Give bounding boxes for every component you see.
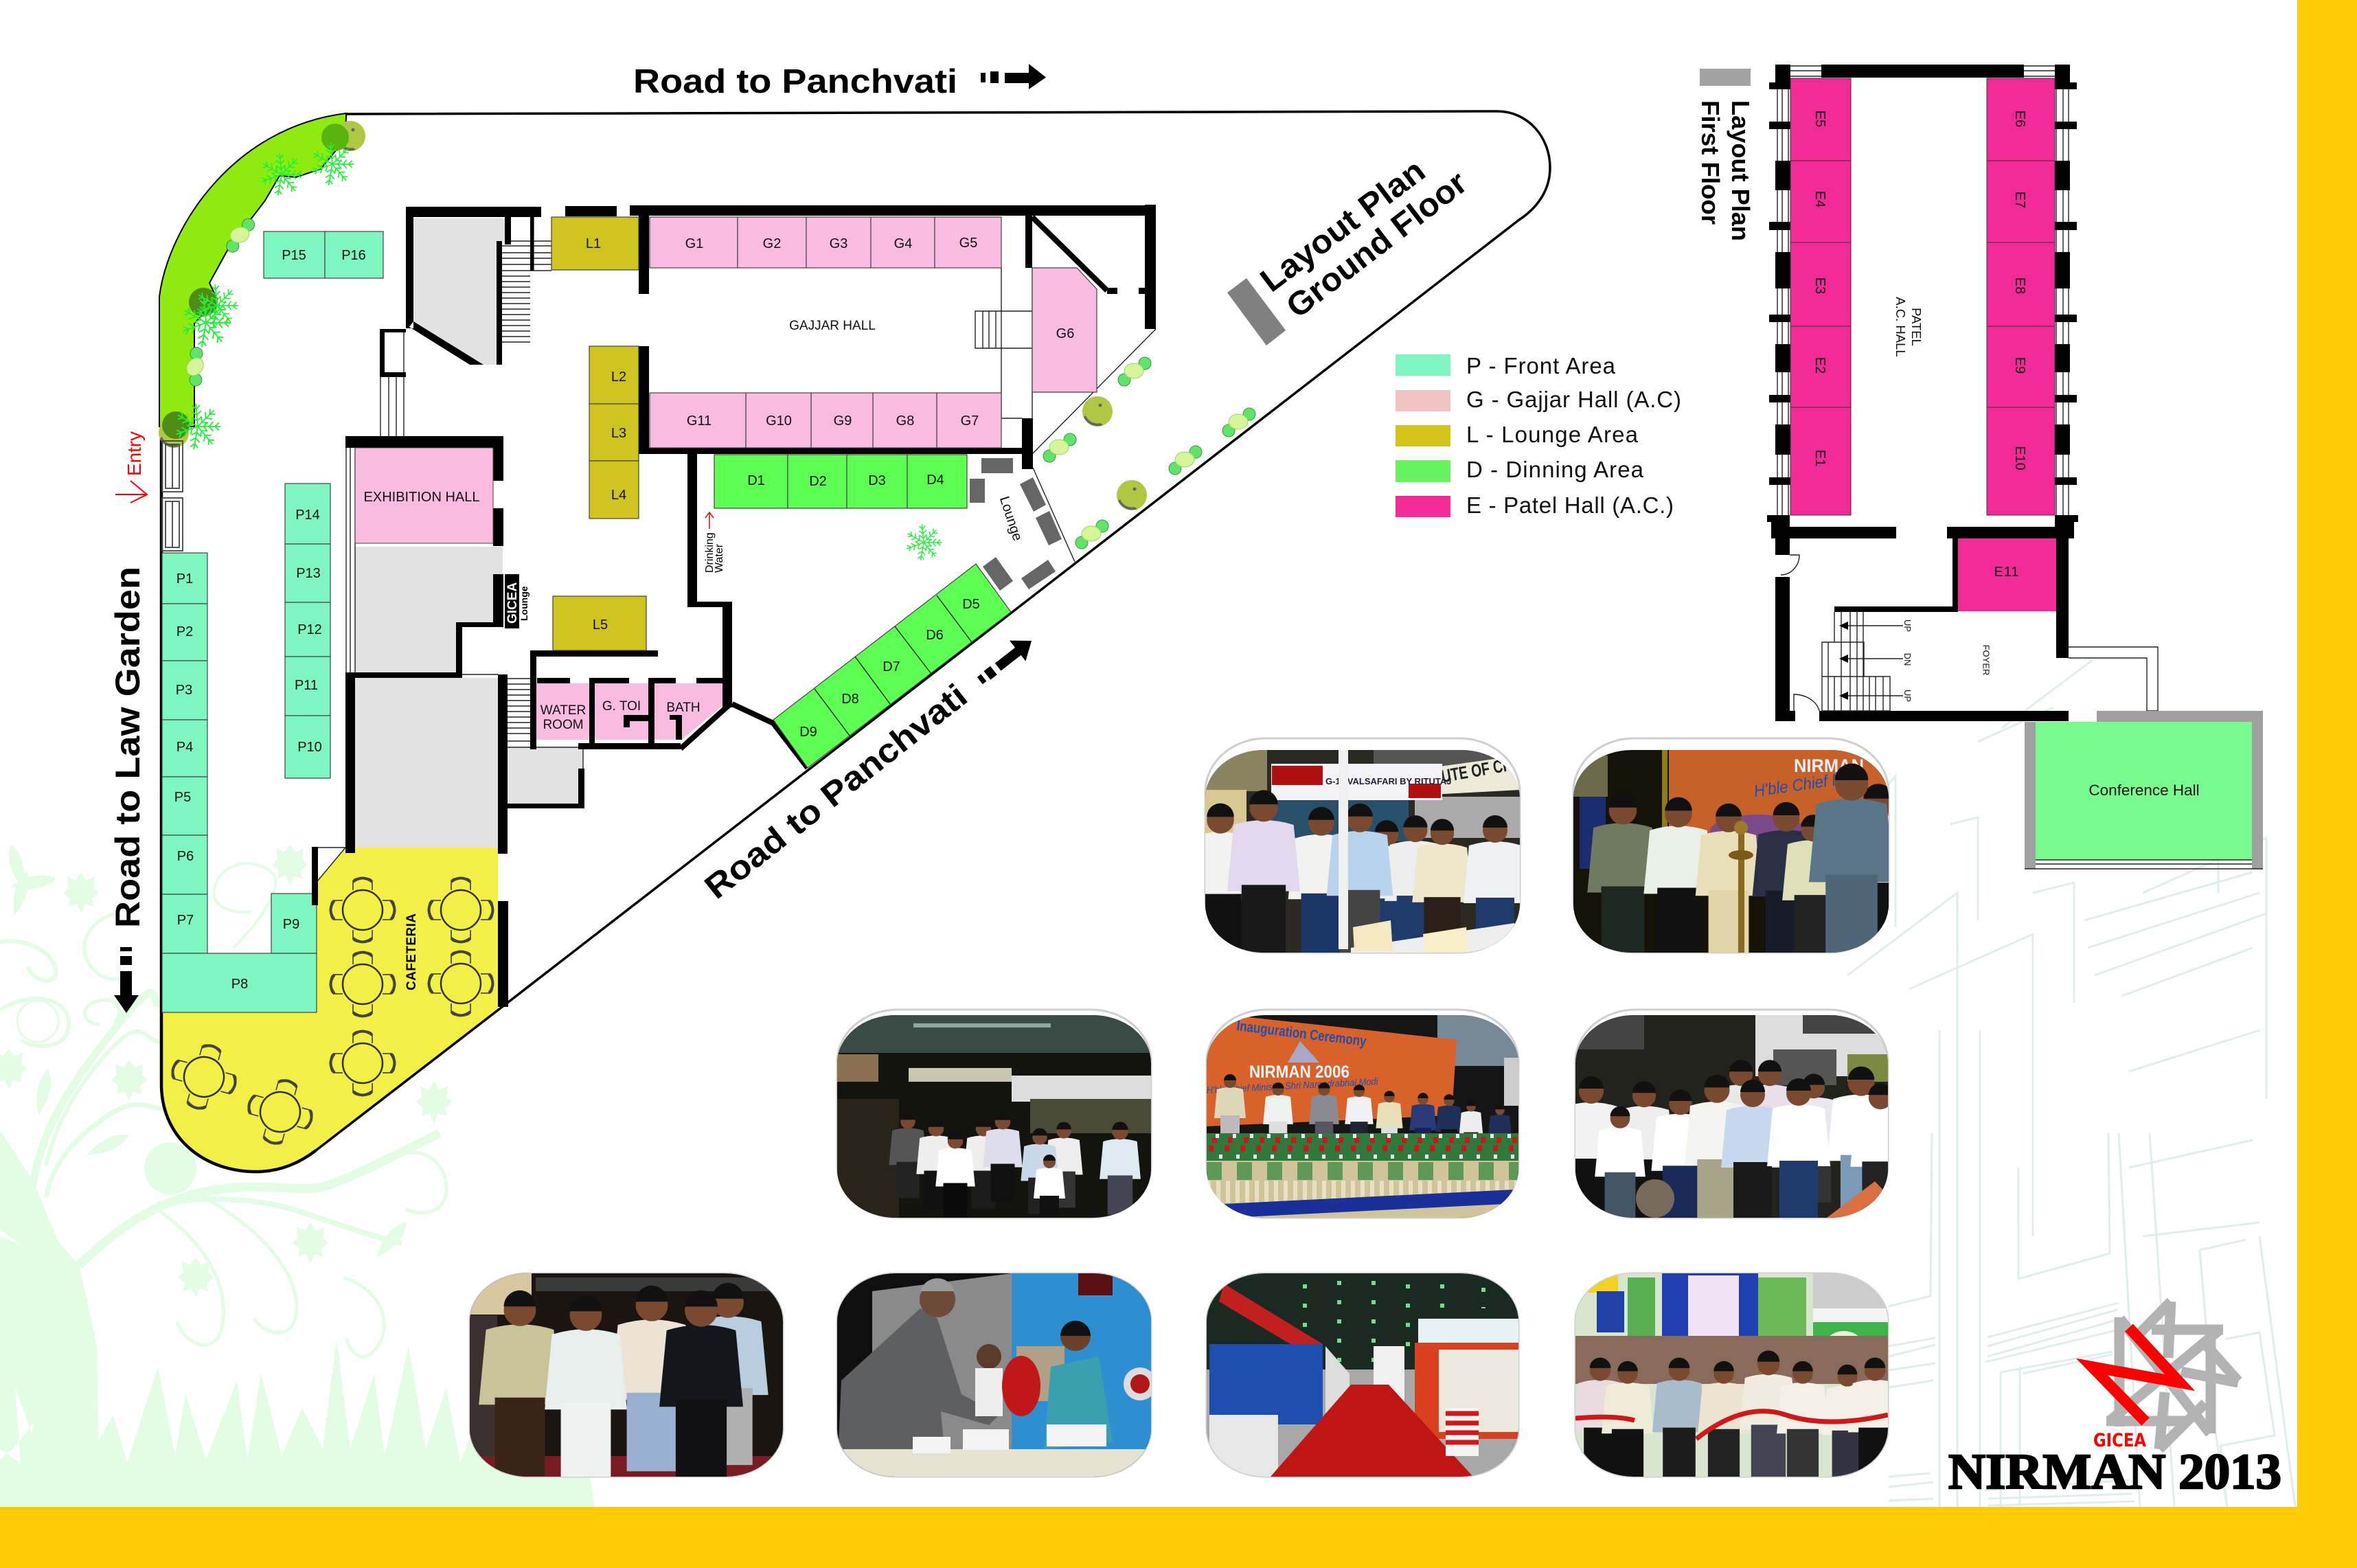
- first floor title: First Floor: [1696, 100, 1724, 225]
- stall: L3: [589, 404, 639, 461]
- stairs and thin construction lines: [318, 217, 1156, 880]
- stall: P2: P2: [177, 624, 193, 639]
- GICEA lounge sign: Lounge: [519, 586, 530, 621]
- GICEA lounge sign: [505, 574, 530, 628]
- yellow frame right: [2297, 0, 2357, 1568]
- photo: lighting the lamp: [1573, 750, 1916, 956]
- garden plants along diagonal road: [1043, 357, 1255, 549]
- stall: P3: P3: [176, 683, 192, 698]
- stall: G7: [937, 393, 1001, 448]
- grey service rooms: [355, 218, 583, 848]
- staircase: [1822, 612, 1890, 711]
- stall: E8: [1987, 242, 2055, 326]
- arrow: top road direction: [981, 64, 1046, 89]
- stall: E5: E5: [1812, 111, 1827, 127]
- black walls: [312, 205, 1156, 1007]
- stall: G6: [1032, 268, 1097, 392]
- stall: E4: [1790, 161, 1851, 242]
- stall: E9: [1987, 326, 2055, 407]
- stall: P1: [162, 553, 207, 604]
- stall: P11: P11: [295, 678, 318, 693]
- stall: E3: [1790, 242, 1851, 326]
- stall: P3: [162, 661, 207, 720]
- stall: D4: [907, 455, 967, 508]
- stall: D3: D3: [868, 473, 886, 488]
- lounge label: Lounge: [997, 495, 1025, 543]
- stalls: D5 to D9 diagonal row: D8: [841, 692, 859, 707]
- cafeteria tables: [164, 878, 493, 1152]
- arrow: diagonal road direction: [972, 630, 1039, 691]
- photo frames: [470, 738, 1889, 1477]
- corridor to conference hall: [2069, 647, 2158, 711]
- stall: G11: G11: [687, 413, 711, 429]
- stall: E11: [1958, 538, 2056, 611]
- stalls: D5 to D9 diagonal row: D7: [883, 659, 900, 674]
- stall: P14: [285, 484, 330, 544]
- stall: L4: L4: [611, 488, 626, 503]
- stall: G2: G2: [763, 236, 781, 251]
- doors: [1781, 555, 1819, 711]
- stall: G4: G4: [894, 236, 912, 251]
- stall: L5: L5: [593, 617, 608, 633]
- stall: P10: [285, 716, 330, 778]
- photo: visitors at stall: [1205, 750, 1520, 953]
- photo: exhibition aisle: [1207, 1273, 1518, 1477]
- stall: E9: E9: [2012, 357, 2027, 374]
- legend: D - Dinning Area: [1466, 457, 1644, 482]
- stair arrows and labels: UP: [1902, 690, 1913, 702]
- heading: road to panchvati top: Road to Panchvati: [633, 63, 957, 100]
- stall: E6: [1987, 78, 2055, 161]
- stall: G9: G9: [834, 413, 852, 429]
- stall: G3: G3: [830, 236, 847, 251]
- cafeteria label: CAFETERIA: [405, 913, 419, 990]
- stall: L3: L3: [611, 426, 626, 441]
- stall: D1: D1: [747, 473, 765, 488]
- stall: E7: E7: [2012, 192, 2027, 208]
- site boundary rounded corner: [161, 427, 316, 1172]
- stall: P10: P10: [297, 740, 322, 755]
- stall: E6: E6: [2012, 111, 2027, 127]
- stall: E5: [1790, 78, 1851, 161]
- photo: visitors at stall: G-11 VALSAFARI BY RITUTAJ: [1325, 776, 1451, 786]
- photo: inauguration stage: [1206, 1015, 1531, 1218]
- stall: G7: G7: [961, 413, 979, 429]
- stall: P1: P1: [177, 571, 193, 587]
- stall: G11: [650, 393, 746, 448]
- stall: D1: [714, 455, 788, 508]
- panel: first floor plan: [1767, 65, 2263, 869]
- stall: P16: P16: [341, 248, 366, 263]
- entry gates: [162, 441, 183, 551]
- stall: P12: P12: [297, 622, 322, 637]
- legend: [1396, 353, 1681, 518]
- panel: ground floor plan: [115, 111, 1550, 1172]
- background tree and grass illustration: [0, 843, 595, 1507]
- first floor title: Layout Plan: [1727, 100, 1755, 241]
- stall: D3: [847, 455, 907, 508]
- stall: P15: P15: [282, 248, 306, 263]
- stall: P8: P8: [231, 977, 248, 992]
- wet rooms: WATER: [540, 703, 586, 718]
- stall: E1: [1790, 407, 1851, 515]
- patel hall label: PATEL: [1909, 308, 1924, 346]
- stall: E2: E2: [1812, 357, 1827, 374]
- background building line art: [1820, 660, 2295, 1507]
- courtyard fern: [905, 524, 942, 561]
- stall: E11: E11: [1994, 565, 2020, 580]
- first floor title: [1696, 100, 1755, 241]
- stall: G2: [738, 217, 806, 268]
- stall: P13: P13: [296, 566, 321, 581]
- photo: inauguration stage: Inauguration Ceremony: [1236, 1018, 1367, 1049]
- stall: E4: E4: [1812, 191, 1827, 207]
- stall: G4: [871, 217, 935, 268]
- wet rooms: ROOM: [543, 718, 584, 732]
- stall: L5: [553, 596, 646, 650]
- window lines: [1777, 66, 2069, 515]
- stall: P4: [162, 720, 207, 777]
- yellow frame bottom: [0, 1507, 2357, 1568]
- stall: P7: P7: [177, 913, 194, 928]
- stall: P15: [264, 231, 325, 278]
- stall: G1: G1: [685, 236, 703, 251]
- patel hall label: A.C. HALL: [1893, 297, 1908, 357]
- photo: ribbon cutting: [1573, 1273, 1902, 1479]
- stalls: D5 to D9 diagonal row: D6: [926, 628, 944, 643]
- stall: P2: [162, 604, 207, 661]
- logo: GICEA star: GICEA: [2093, 1430, 2146, 1451]
- arrow: law garden direction: [114, 947, 139, 1013]
- drinking water label: Drinking: [704, 532, 716, 573]
- GICEA lounge sign: GICEA: [505, 582, 520, 624]
- stall: E10: E10: [2012, 446, 2027, 470]
- drinking water label: [704, 512, 725, 573]
- heading: road to law garden: Road to Law Garden: [109, 567, 147, 928]
- wet rooms: [536, 683, 722, 740]
- logo: GICEA star: [2092, 1302, 2238, 1451]
- stall: E2: [1790, 326, 1851, 407]
- stall: D4: D4: [926, 473, 944, 488]
- stall: E7: [1987, 161, 2055, 242]
- stall: P6: P6: [177, 849, 194, 864]
- stall: P11: [285, 657, 330, 716]
- first floor title bar: [1700, 69, 1751, 86]
- stall: D2: D2: [809, 474, 827, 489]
- stall: L4: [589, 461, 639, 519]
- photo: visitors at stall: INSTITUTE OF CIV: [1398, 753, 1517, 794]
- stall: P4: P4: [177, 740, 193, 755]
- stall: P16: [325, 231, 383, 278]
- wet rooms: BATH: [666, 701, 701, 715]
- stall: P14: P14: [295, 508, 320, 523]
- stall: E10: [1987, 407, 2055, 515]
- entry label: Entry: [124, 431, 145, 476]
- photo: lighting the lamp: H'ble Chief Min: [1753, 768, 1857, 801]
- lounge seating: [970, 458, 1062, 591]
- grey title bar ground floor: [1227, 278, 1286, 345]
- drinking water label: Water: [714, 543, 725, 573]
- stall: G5: [935, 217, 1001, 268]
- legend: L - Lounge Area: [1466, 422, 1639, 447]
- cafeteria floor: [162, 848, 498, 1172]
- stall: G10: [746, 393, 811, 448]
- legend: G - Gajjar Hall (A.C): [1466, 387, 1681, 412]
- first floor walls: [1767, 65, 2078, 721]
- legend: P - Front Area: [1466, 353, 1616, 378]
- stall: D2: [788, 455, 847, 508]
- stall: G1: [650, 217, 738, 268]
- photo: lighting the lamp: NIRMAN: [1794, 755, 1864, 776]
- stalls: D5 to D9 diagonal row: D5: [962, 597, 980, 612]
- entry arrow: [115, 481, 147, 503]
- stall: G10: G10: [766, 413, 792, 429]
- stall: L2: [589, 346, 639, 404]
- stall: G3: [806, 217, 871, 268]
- stall: P6: [162, 835, 207, 894]
- stall: P9: P9: [283, 917, 299, 932]
- exhibition hall: [355, 448, 493, 543]
- stalls: D5 to D9 diagonal row: [773, 564, 1011, 768]
- garden strip: [159, 113, 346, 427]
- heading: road to panchvati diagonal: Road to Panchvati: [698, 677, 975, 907]
- stall: L1: [551, 217, 639, 270]
- stall: P13: [285, 544, 330, 602]
- stall: P9: [271, 894, 317, 953]
- stall: P5: [162, 777, 207, 835]
- stall: E1: E1: [1812, 450, 1827, 466]
- garden trees and plants: [159, 121, 365, 450]
- stall: G9: [811, 393, 873, 448]
- stair arrows and labels: [1839, 620, 1913, 702]
- stall: E8: E8: [2012, 277, 2027, 294]
- stalls: D5 to D9 diagonal row: D9: [799, 725, 817, 740]
- diagonal walls: [681, 217, 1107, 768]
- stall: P5: P5: [174, 790, 191, 805]
- stall: G8: G8: [896, 413, 914, 429]
- stall: E3: E3: [1812, 277, 1827, 294]
- stall: G6: G6: [1056, 326, 1074, 341]
- conference hall: Conference Hall: [2088, 782, 2200, 799]
- exhibition hall: EXHIBITION HALL: [364, 490, 479, 505]
- photo: bouquet presentation: [837, 1273, 1157, 1477]
- stall: P7: [162, 894, 207, 953]
- stall: G8: [873, 393, 937, 448]
- wet rooms: G. TOI: [602, 699, 641, 714]
- photo: inauguration stage: NIRMAN 2006: [1249, 1063, 1350, 1082]
- photo: delegates shaking hands: [1575, 1015, 1888, 1218]
- conference hall: [2025, 711, 2263, 869]
- gajjar hall label: GAJJAR HALL: [789, 319, 876, 333]
- patel hall label: [1893, 297, 1924, 357]
- photo: inauguration stage: H'ble Chief Minister Shri Narendrabhai Modi: [1206, 1076, 1379, 1095]
- stair arrows and labels: UP: [1902, 620, 1913, 632]
- stall: G5: G5: [959, 236, 977, 251]
- photo: exhibition crowd: [837, 1015, 1151, 1226]
- legend: E - Patel Hall (A.C.): [1466, 492, 1674, 518]
- stall: L1: L1: [586, 236, 601, 251]
- site boundary: [316, 111, 1550, 1150]
- stall: P12: [285, 602, 330, 657]
- photo: dignitaries walking: [470, 1273, 783, 1481]
- stall: P8: [162, 953, 317, 1012]
- foyer label: FOYER: [1981, 645, 1991, 675]
- stair arrows and labels: DN: [1902, 653, 1913, 666]
- heading: layout plan ground floor: Layout Plan: [1254, 152, 1432, 299]
- title: NIRMAN 2013: NIRMAN 2013: [1948, 1444, 2281, 1499]
- stall: L2: L2: [611, 370, 626, 385]
- heading: layout plan ground floor: Ground Floor: [1279, 164, 1474, 326]
